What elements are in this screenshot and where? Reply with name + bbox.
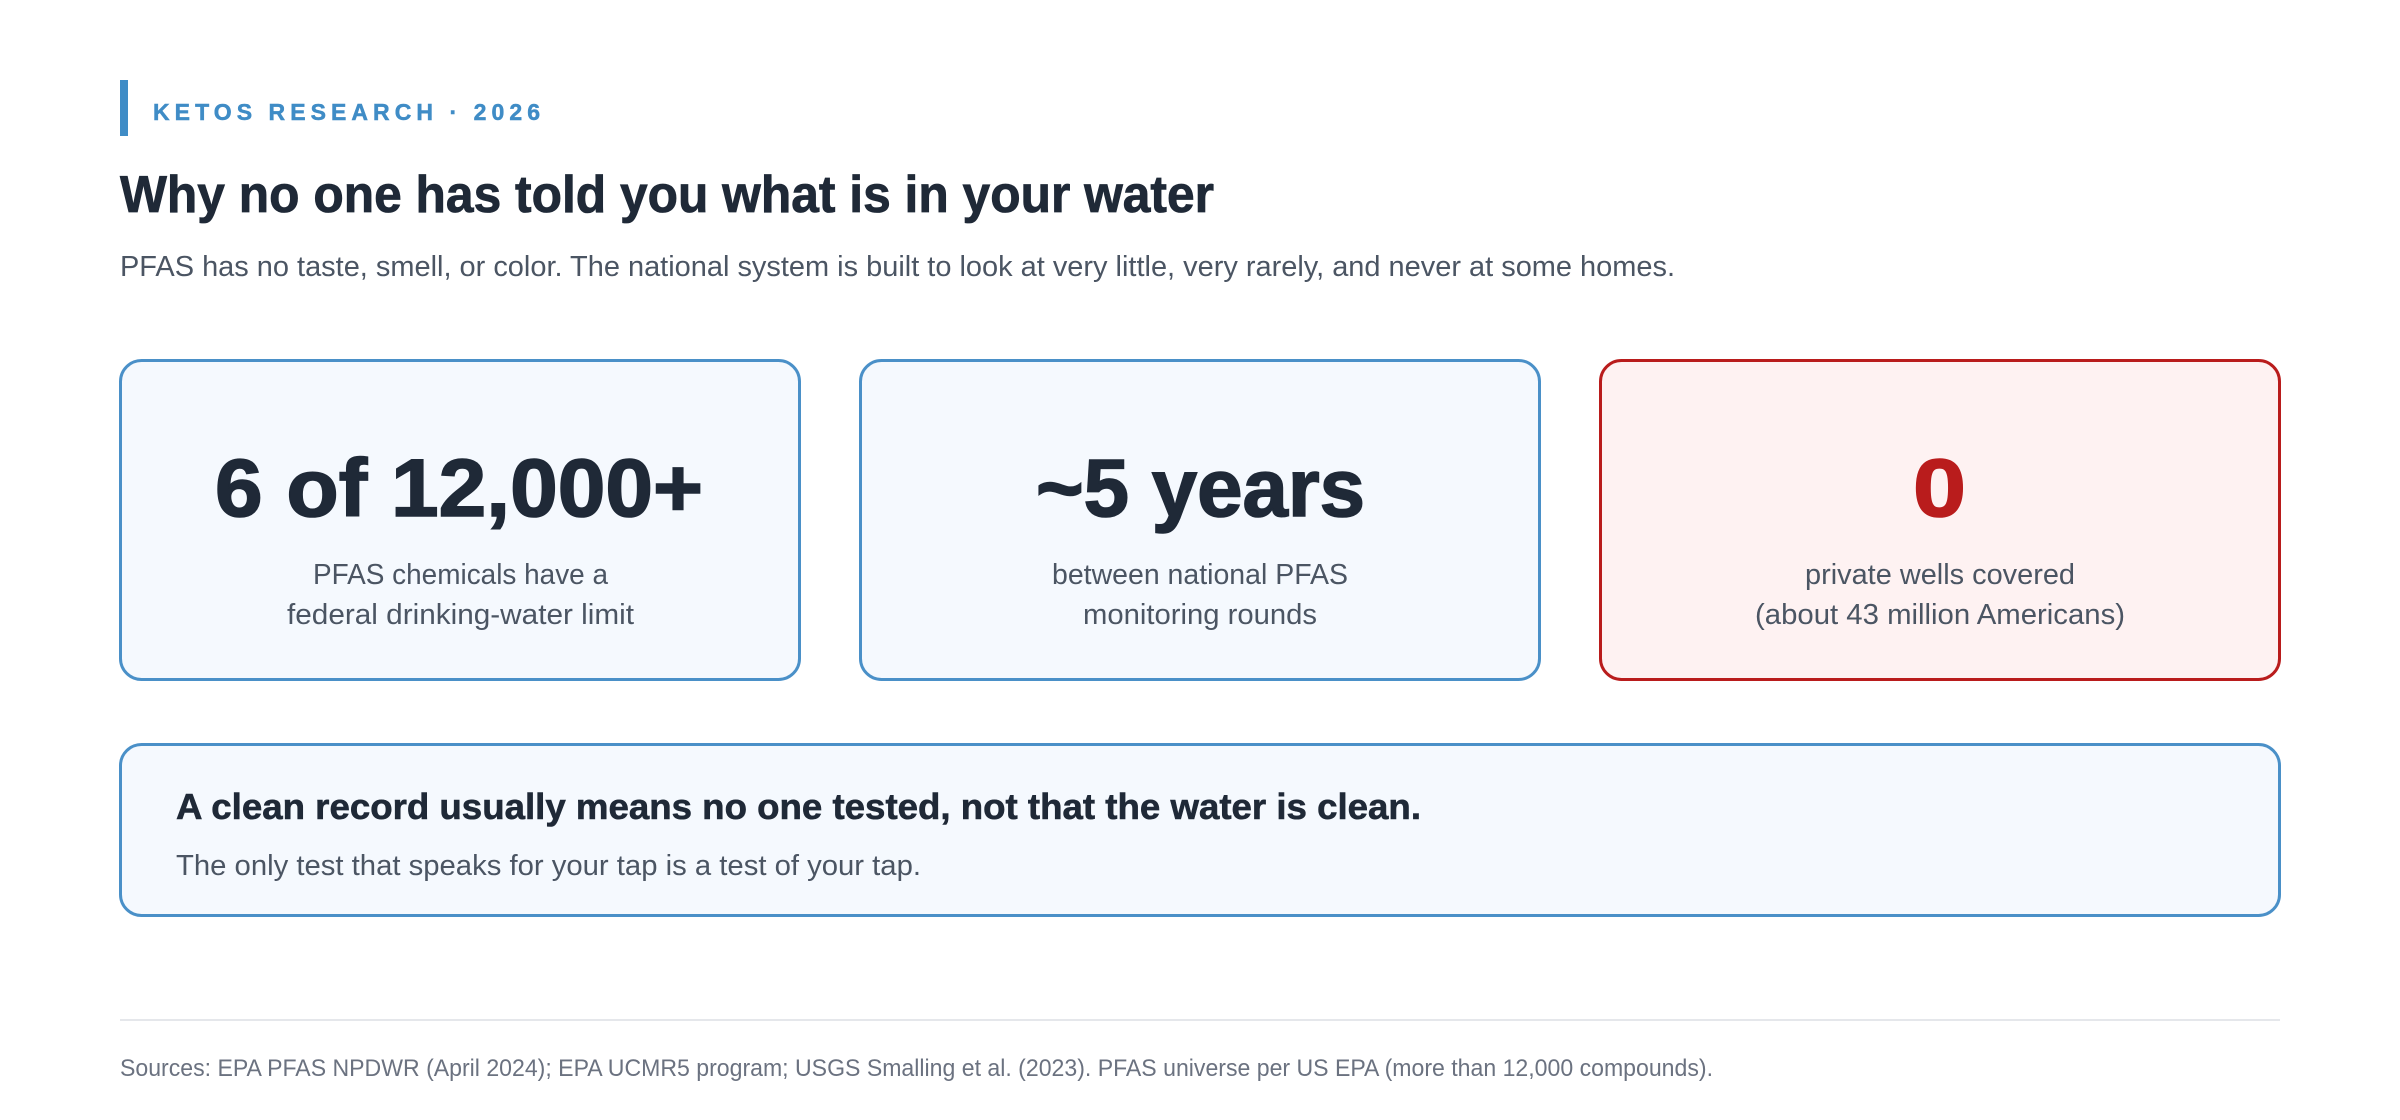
stat value: ~5 years: ~5 years: [1036, 443, 1365, 534]
panel: private wells stat: [1600, 360, 2280, 680]
panel: monitoring interval stat: [860, 360, 1540, 680]
title: Why no one has told you what is in your water: [120, 166, 1214, 224]
sources footer: Sources: EPA PFAS NPDWR (April 2024); EPA UCMR5 program; USGS Smalling et al. (2023). PFAS universe per US EPA (more than 12,000 compounds).: [120, 1055, 1713, 1082]
stat value: 0: 0: [1913, 443, 1966, 534]
header eyebrow: [120, 80, 540, 136]
callout body: The only test that speaks for your tap is a test of your tap.: [176, 850, 921, 882]
stat label: monitoring rounds: monitoring rounds: [1083, 599, 1317, 631]
stat label: monitoring rounds: [1052, 559, 1348, 631]
panel: callout: [120, 744, 2280, 916]
stat label: private wells: private wells covered: [1805, 559, 2075, 591]
panel: federal limit stat: [120, 360, 800, 680]
stat label: private wells: (about 43 million Americans): [1755, 599, 2125, 631]
stat value: 6 of 12,000+: 6 of 12,000+: [215, 443, 703, 534]
callout heading: A clean record usually means no one tested, not that the water is clean.: [176, 786, 1421, 827]
stat label: private wells: [1755, 559, 2125, 631]
subtitle: PFAS has no taste, smell, or color. The national system is built to look at very little, very rarely, and never at some homes.: [120, 251, 1675, 283]
stat label: federal limit: PFAS chemicals have a: [313, 559, 609, 591]
header eyebrow: KETOS RESEARCH · 2026: [153, 99, 540, 125]
stat label: federal limit: [287, 559, 634, 631]
stat label: federal limit: federal drinking-water limit: [287, 599, 634, 631]
stat label: monitoring rounds: between national PFAS: [1052, 559, 1348, 591]
